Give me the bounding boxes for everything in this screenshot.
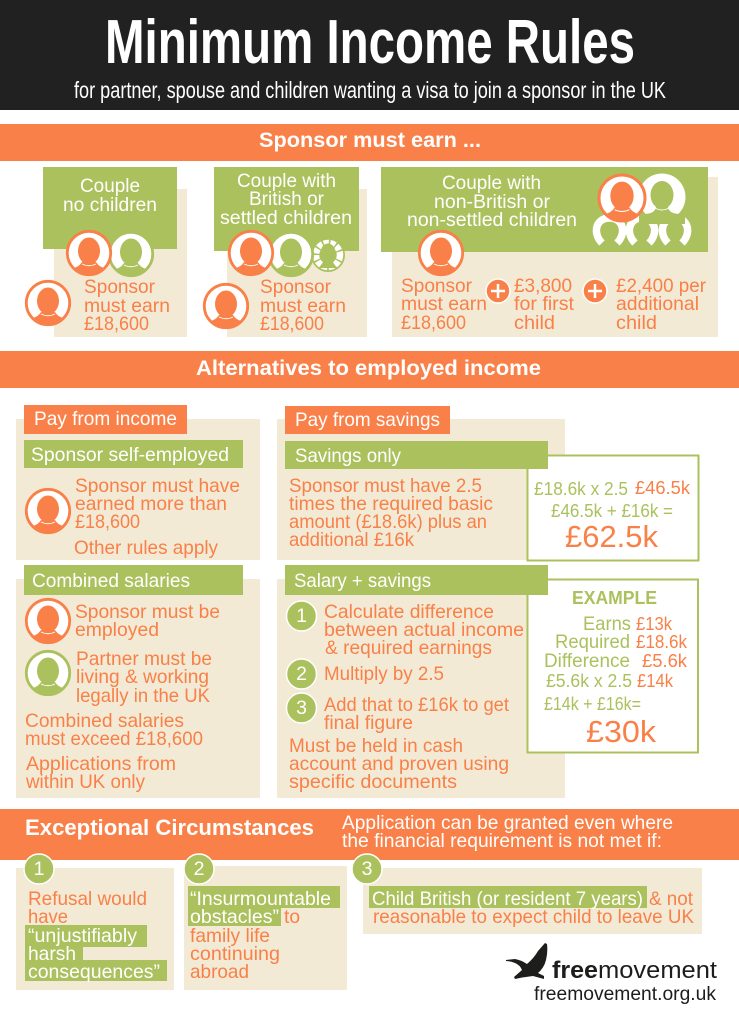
logo: free movement: free [552, 957, 598, 984]
panel: couple with non-British children: non-British or [434, 191, 550, 213]
panel: combined salaries: must exceed £18,600 [25, 728, 203, 750]
logo: free movement: freemovement.org.uk [534, 983, 716, 1005]
panel: couple with non-British children: £18,600 [401, 312, 466, 334]
panel: savings only: Pay from savings [295, 409, 440, 431]
panel: couple with non-British children: child [616, 312, 657, 334]
panel: couple with non-British children [381, 167, 718, 337]
step 3 [286, 693, 510, 734]
panel: combined salaries: within UK only [25, 771, 145, 793]
panel: combined salaries: living & working [76, 666, 209, 688]
panel: couple no children [24, 167, 187, 337]
panel: exception 2 [184, 854, 347, 990]
calculation box: example [528, 580, 698, 752]
calculation box: example: Earns [583, 613, 631, 635]
step 3: Add that to £16k to get [324, 694, 510, 716]
panel: salary + savings: Must be held in cash [289, 735, 463, 757]
icon: plus [486, 279, 510, 303]
step 1 [286, 601, 524, 659]
panel: couple with non-British children: must earn [401, 293, 487, 315]
heading: salary + savings: Salary + savings [294, 570, 431, 592]
section band: exceptional circumstances: Exceptional Circumstances [25, 815, 314, 840]
panel: exception 2: to [284, 906, 300, 928]
panel: couple with non-British children: Couple with [442, 172, 541, 194]
panel: exception 1 [16, 854, 174, 990]
panel: exception 1: 1 [34, 858, 44, 880]
panel: couple with non-British children: Sponsor [401, 275, 472, 297]
panel: combined salaries: Applications from [26, 753, 176, 775]
calculation box: savings [528, 456, 698, 560]
panel: couple with non-British children: child [514, 312, 555, 334]
panel: combined salaries: Combined salaries [32, 570, 190, 592]
step 2 [286, 659, 444, 689]
section band: alternatives [0, 351, 739, 388]
heading: savings only: Savings only [295, 445, 401, 467]
calculation box: example: Required [555, 631, 630, 653]
panel: combined salaries: Partner must be [76, 648, 212, 670]
panel: couple no children: Couple [80, 175, 140, 197]
calculation box: savings: £18.6k x 2.5 [534, 479, 628, 499]
panel: couple no children: £18,600 [84, 313, 149, 335]
icon: bird [506, 943, 547, 979]
panel: savings only: times the required basic [289, 493, 493, 515]
calculation box: example: £30k [586, 714, 657, 749]
heading: salary + savings [285, 565, 548, 595]
heading: savings only [285, 441, 548, 469]
panel: exception 3: reasonable to expect child to leave UK [373, 906, 694, 928]
panel: exception 2: 2 [194, 858, 204, 880]
panel: couple with British or settled children: Sponsor [260, 276, 331, 298]
panel: exception 3 [352, 854, 702, 934]
panel: couple with British or settled children: settled children [220, 207, 352, 229]
calculation box: example: £18.6k [636, 631, 688, 652]
step 1: Calculate difference [324, 601, 494, 623]
panel: sponsor self-employed: Pay from income [34, 408, 177, 430]
icon: family group [596, 174, 688, 243]
panel: combined salaries [16, 565, 260, 798]
section band: sponsor must earn: Sponsor must earn ... [259, 129, 481, 152]
calculation box: example: £5.6k x 2.5 [546, 670, 632, 691]
panel: exception 3: 3 [362, 858, 372, 880]
panel: couple no children: no children [63, 194, 157, 216]
icon: plus [583, 279, 607, 303]
panel: sponsor self-employed: £18,600 [75, 511, 140, 533]
calculation box: example: £14k + £16k= [544, 693, 641, 714]
panel: combined salaries: Combined salaries [25, 710, 184, 732]
step 2: Multiply by 2.5 [324, 663, 444, 685]
panel: exception 3: Child British (or resident 7 years) [372, 888, 643, 910]
step 3: final figure [324, 712, 413, 734]
panel: exception 2: continuing [190, 943, 280, 965]
panel: exception 2: obstacles” [190, 906, 279, 928]
panel: couple with non-British children: for first [514, 293, 575, 315]
calculation box: savings: £62.5k [565, 519, 658, 554]
section band: alternatives: Alternatives to employed income [196, 357, 541, 380]
panel: couple with British or settled children: British or [249, 188, 324, 210]
panel: combined salaries: legally in the UK [76, 685, 210, 707]
panel: couple with non-British children: non-settled children [407, 209, 577, 231]
panel: couple with British or settled children: Couple with [237, 170, 336, 192]
step 1: between actual income [324, 619, 524, 641]
panel: salary + savings: specific documents [289, 771, 457, 793]
logo: free movement: movement [598, 957, 717, 984]
panel: exception 1: “unjustifiably [28, 925, 137, 947]
calculation box: example: £14k [637, 670, 674, 691]
panel: exception 2: “Insurmountable [190, 888, 331, 910]
step 3: 3 [296, 697, 307, 719]
panel: exception 1: have [28, 906, 68, 928]
panel: exception 2: abroad [190, 961, 249, 983]
panel: couple with non-British children: £3,800 [514, 275, 572, 297]
calculation box: example: Difference [544, 650, 630, 672]
panel: sponsor self-employed: Sponsor self-employed [31, 444, 229, 466]
panel: couple with non-British children: £2,400 per [616, 275, 706, 297]
panel: sponsor self-employed: Sponsor must have [75, 475, 240, 497]
section band: sponsor must earn [0, 124, 739, 161]
panel: sponsor self-employed: Other rules apply [74, 537, 218, 559]
panel: salary + savings: account and proven using [289, 753, 509, 775]
panel: exception 2: family life [190, 925, 270, 947]
panel: sponsor self-employed [16, 405, 260, 560]
calculation box: example: £13k [636, 613, 673, 634]
panel: combined salaries: Sponsor must be [75, 601, 220, 623]
step 1: 1 [296, 605, 307, 627]
panel: exception 1: consequences” [28, 961, 160, 983]
step 1: & required earnings [325, 637, 492, 659]
step 2: 2 [296, 663, 307, 685]
panel: exception 3: & not [649, 888, 694, 910]
panel: savings only: amount (£18.6k) plus an [289, 511, 487, 533]
calculation box: example: £5.6k [642, 650, 688, 671]
panel: salary + savings [277, 579, 565, 798]
panel: exception 1: harsh [28, 943, 76, 965]
panel: combined salaries: employed [75, 619, 159, 641]
calculation box: savings: £46.5k + £16k = [551, 501, 673, 521]
panel: sponsor self-employed: earned more than [75, 493, 227, 515]
section band: exceptional circumstances: the financial requirement is not met if: [342, 830, 662, 852]
calculation box: savings: £46.5k [635, 478, 691, 498]
panel: savings only [277, 406, 565, 560]
section band: exceptional circumstances [0, 809, 739, 860]
panel: couple with British or settled children: must earn [260, 295, 346, 317]
panel: exception 1: Refusal would [28, 888, 147, 910]
panel: couple no children: Sponsor [84, 276, 155, 298]
calculation box: example: EXAMPLE [572, 587, 657, 608]
panel: savings only: additional £16k [289, 529, 414, 551]
panel: couple with non-British children: additional [616, 293, 699, 315]
panel: savings only: Sponsor must have 2.5 [289, 475, 482, 497]
logo: free movement [506, 943, 717, 1005]
panel: couple with British or settled children: £18,600 [260, 313, 324, 335]
panel: couple with British or settled children [202, 167, 367, 337]
header band [0, 0, 739, 110]
panel: couple no children: must earn [84, 295, 170, 317]
section band: exceptional circumstances: Application can be granted even where [342, 812, 673, 834]
